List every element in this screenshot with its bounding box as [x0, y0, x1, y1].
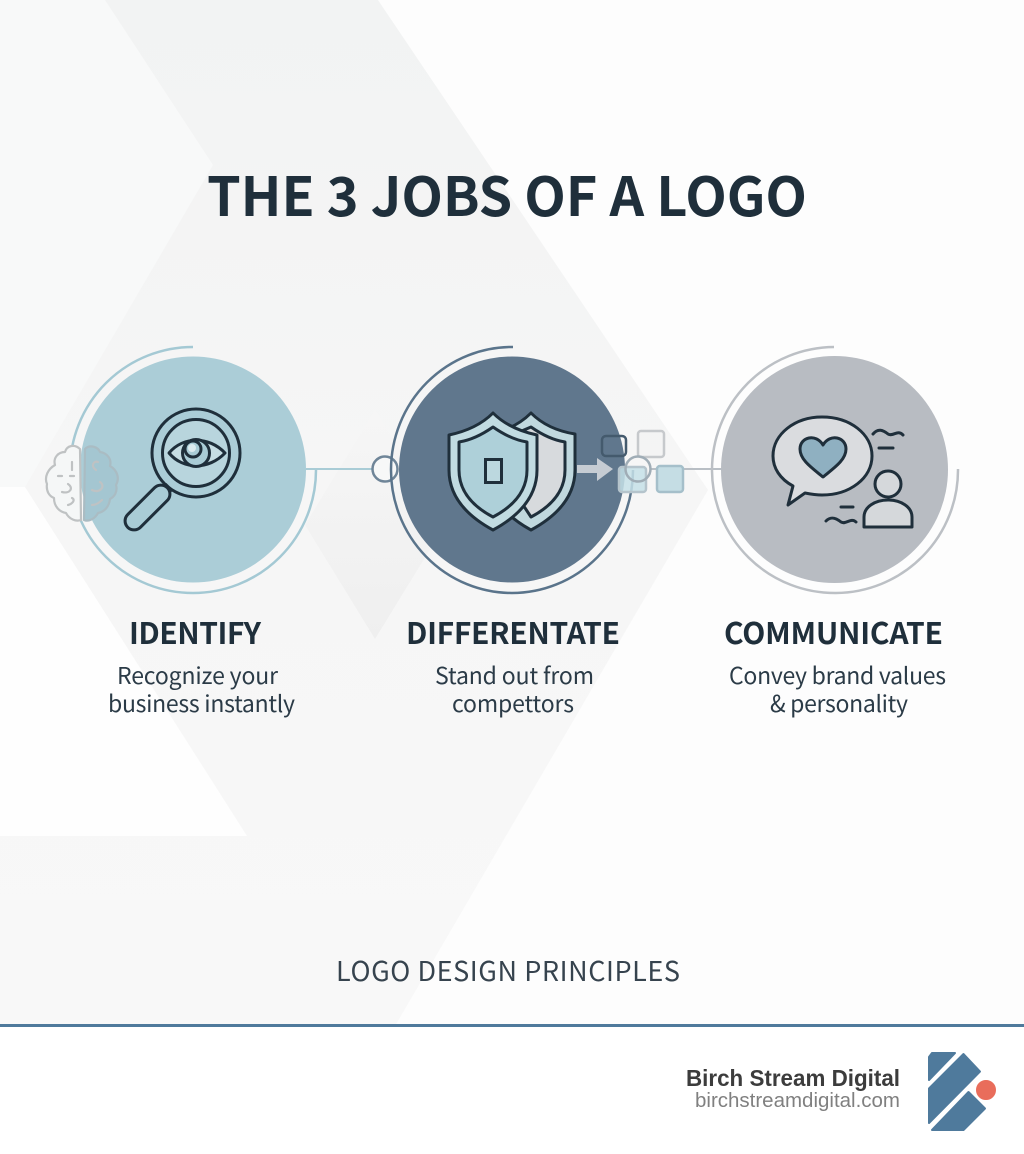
- text: communicate description: & personality: [770, 685, 908, 719]
- heading: identify: IDENTIFY: [129, 609, 262, 653]
- heading: communicate: COMMUNICATE: [724, 609, 943, 653]
- icon: magnifying glass with eye: [121, 409, 240, 534]
- text: communicate description: Convey brand values: [729, 657, 946, 691]
- text: identify description: business instantly: [108, 685, 295, 719]
- icon: brain: [46, 446, 118, 521]
- panel: identify: [46, 347, 316, 593]
- text: differentiate description: [435, 657, 594, 719]
- title: THE 3 JOBS OF A LOGO: [207, 153, 807, 232]
- icon: speech bubble, heart and person: [773, 417, 912, 527]
- caption: LOGO DESIGN PRINCIPLES: [336, 950, 680, 989]
- text: identify description: [108, 657, 295, 719]
- circle: identify: [80, 356, 306, 582]
- circle: communicate: [721, 356, 948, 583]
- text: differentiate description: compettors: [452, 685, 574, 719]
- panel: differentiate: [391, 347, 633, 593]
- footer url: birchstreamdigital.com: [695, 1090, 900, 1112]
- connector line: differentiate to communicate: [650, 468, 722, 470]
- ring: differentiate: [391, 347, 633, 593]
- text: identify description: Recognize your: [117, 657, 278, 691]
- footer brand name: Birch Stream Digital: [686, 1065, 900, 1091]
- text: differentiate description: Stand out from: [435, 657, 594, 691]
- text: communicate description: [729, 657, 946, 719]
- ring: communicate: [712, 347, 958, 593]
- icon: arrow: [577, 458, 613, 481]
- connector line: identify to differentiate: [306, 468, 373, 470]
- node: left connector: [372, 456, 398, 482]
- ring: identify: [70, 347, 316, 593]
- circle: differentiate: [399, 356, 625, 582]
- icon: transition squares: [602, 431, 683, 492]
- panel: communicate: [712, 347, 958, 593]
- logo mark: [929, 1053, 996, 1130]
- icon: shields: [449, 413, 575, 530]
- footer band: [0, 1024, 1024, 1154]
- heading: differentiate: DIFFERENTATE: [406, 609, 620, 653]
